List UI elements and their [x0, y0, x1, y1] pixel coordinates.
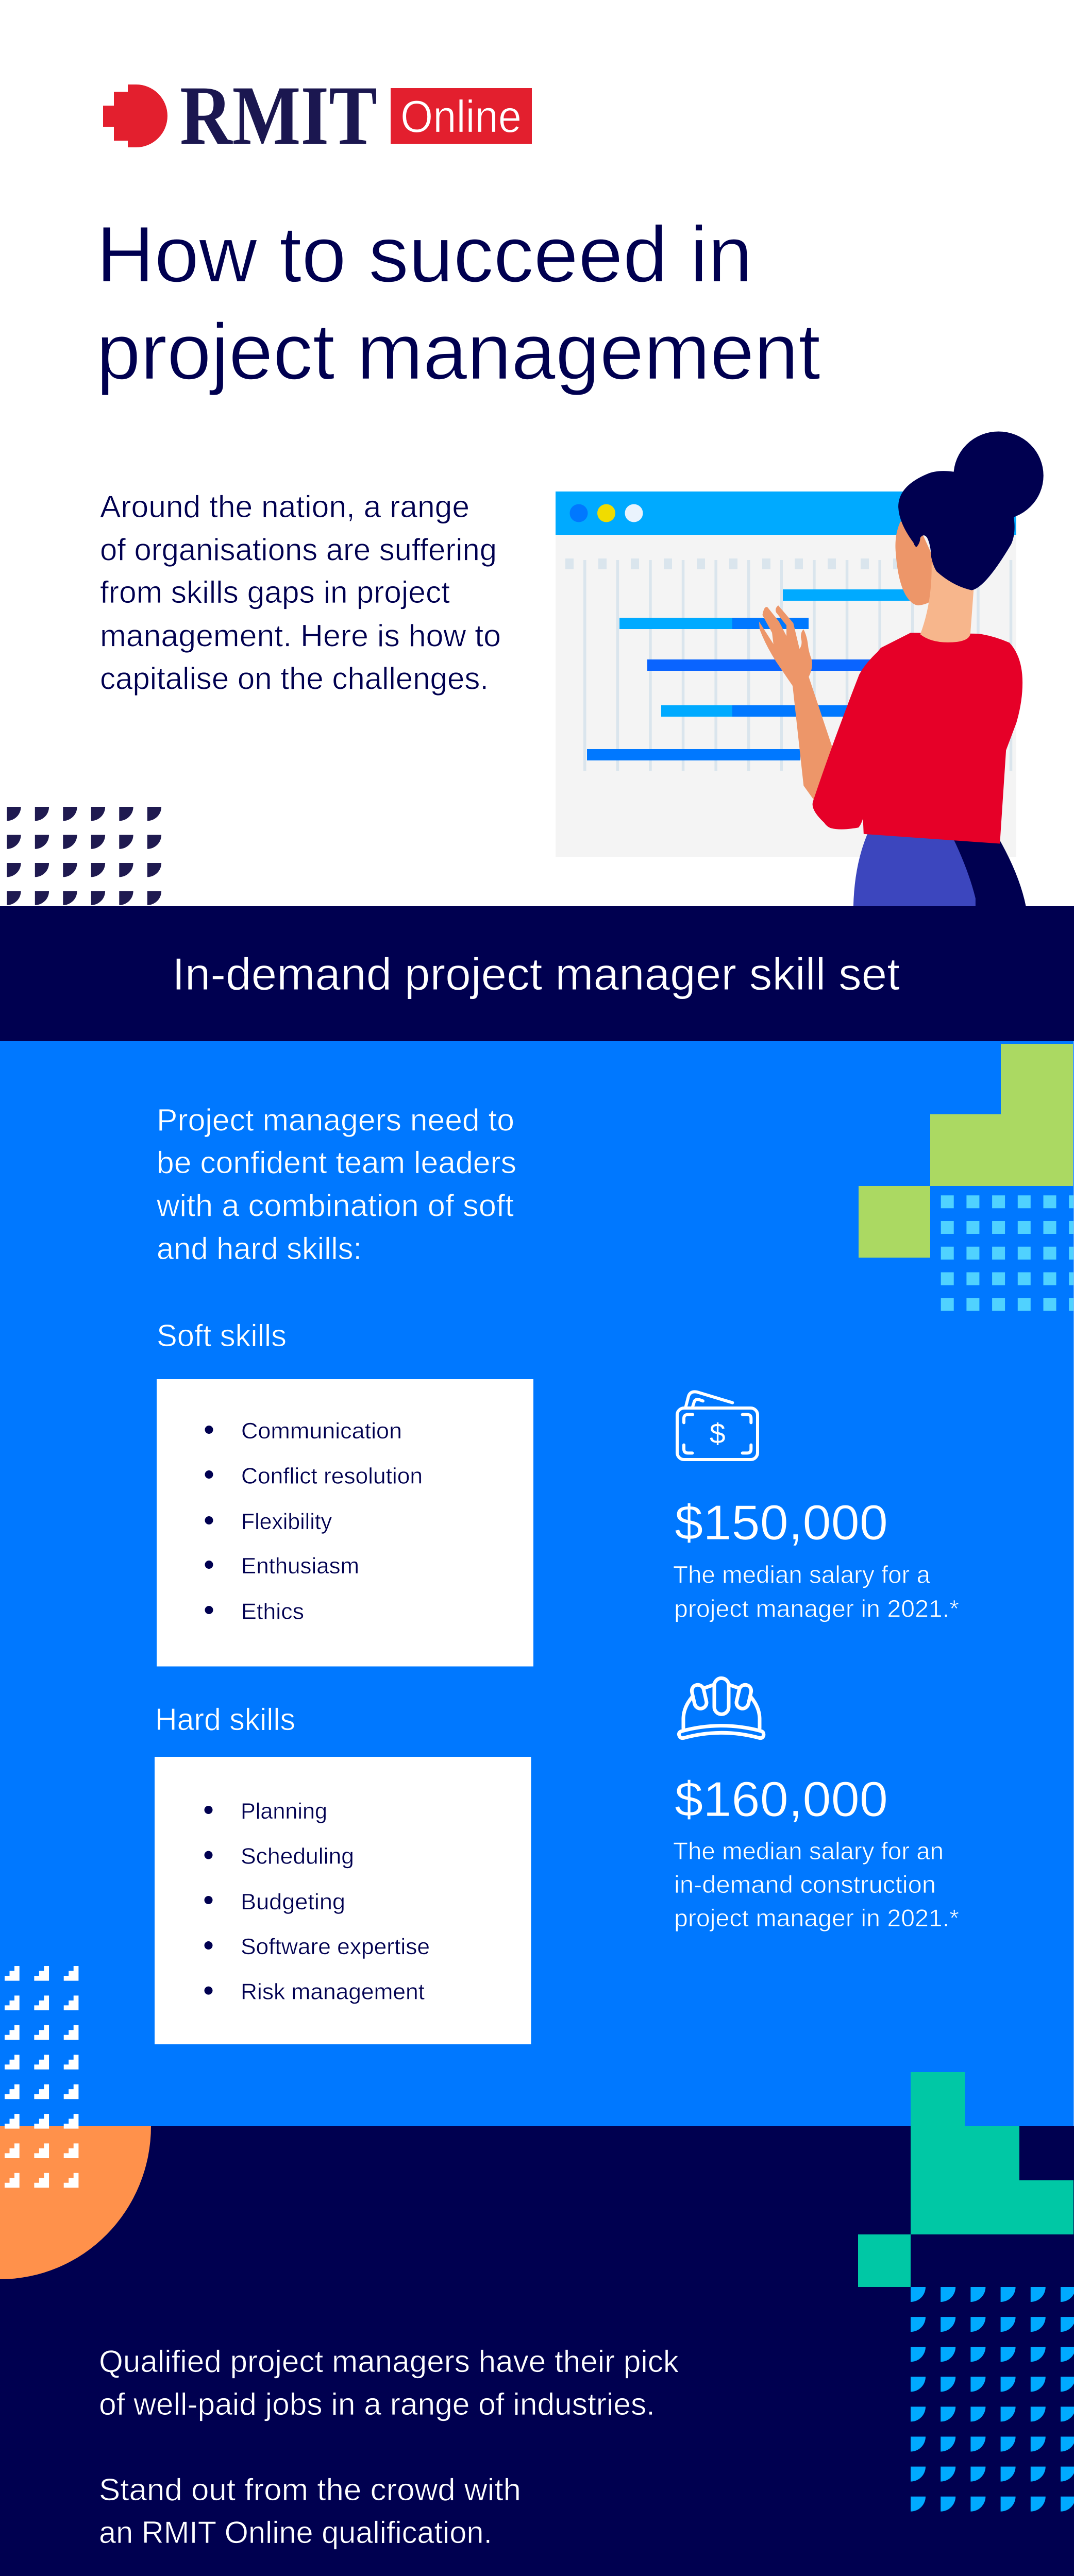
panel: hard skills list: Planning	[241, 1799, 327, 1824]
closing text: an RMIT Online qualification.	[99, 2515, 492, 2550]
band: section heading: In-demand project manager skill set	[172, 948, 900, 999]
closing text: Stand out from the crowd with	[99, 2472, 521, 2507]
panel: soft skills list: Enthusiasm	[241, 1553, 359, 1579]
panel: soft skills list: Communication	[241, 1418, 402, 1444]
intro text: Around the nation, a range	[100, 489, 469, 524]
closing text: Qualified project managers have their pick	[99, 2344, 679, 2379]
panel: soft skills list: Flexibility	[241, 1509, 332, 1534]
panel: blue skills section	[0, 1041, 1074, 2126]
skirt	[853, 831, 977, 906]
stat: 150,000 salary: $150,000	[675, 1495, 888, 1550]
stat: 160,000 salary: $160,000	[675, 1772, 888, 1827]
arm and hand	[759, 605, 833, 803]
panel: soft skills list	[157, 1379, 533, 1666]
stat: 160,000 salary: in-demand construction	[674, 1871, 936, 1898]
panel: hard skills list: Software expertise	[241, 1934, 430, 1959]
text: skills intro: Project managers need to	[157, 1103, 514, 1138]
icon: banknotes: $	[710, 1418, 726, 1450]
panel: soft skills list: Ethics	[241, 1599, 304, 1624]
illustration: woman pointing at chart	[759, 432, 1044, 906]
title	[96, 210, 820, 396]
icon: hard hat	[679, 1678, 764, 1738]
title: project management	[96, 307, 820, 396]
panel: navy closing section	[0, 2126, 1074, 2576]
text: skills intro: with a combination of soft	[156, 1189, 514, 1223]
pattern: light blue squares	[941, 1195, 1074, 1311]
pattern: cyan quarter circles	[911, 2287, 1074, 2512]
stat: 150,000 salary: project manager in 2021.*	[674, 1595, 959, 1622]
chart grid	[565, 558, 1012, 771]
panel: hard skills list	[155, 1757, 531, 2044]
logo badge: Online	[391, 88, 532, 144]
window body	[556, 535, 1016, 857]
text: skills intro	[156, 1103, 516, 1266]
shirt	[813, 633, 1022, 844]
icon: banknotes	[677, 1392, 758, 1460]
logo: RMIT Online: Online	[400, 91, 522, 142]
stat: 150,000 salary: The median salary for a	[673, 1561, 931, 1588]
panel: hard skills list: Risk management	[241, 1979, 425, 2005]
background: white top section	[0, 0, 1074, 906]
stat: 160,000 salary	[673, 1772, 959, 1931]
text: skills intro: and hard skills:	[157, 1231, 362, 1266]
intro text: of organisations are suffering	[100, 533, 497, 567]
pattern: white stair steps	[5, 1966, 78, 2188]
heading: hard skills: Hard skills	[155, 1702, 295, 1737]
face	[895, 521, 937, 605]
decoration: teal pixel block	[858, 2072, 1073, 2287]
window dots	[570, 504, 643, 522]
panel: hard skills list: Budgeting	[241, 1889, 345, 1914]
neck	[920, 564, 974, 642]
closing text: of well-paid jobs in a range of industries.	[99, 2387, 655, 2421]
stat: 160,000 salary: The median salary for an	[673, 1837, 944, 1865]
decoration: orange quarter circle	[0, 2126, 151, 2279]
window header	[556, 492, 1016, 535]
band: section heading	[0, 906, 1074, 1041]
hair	[898, 471, 1015, 590]
pattern: navy quarter circles	[7, 807, 161, 905]
edge strip	[1073, 1041, 1074, 2126]
decoration: green pixel block	[859, 1044, 1073, 1258]
gantt bars	[587, 589, 912, 760]
logo: RMIT Online	[103, 69, 532, 162]
stat: 160,000 salary: project manager in 2021.*	[674, 1904, 959, 1931]
title: How to succeed in	[96, 210, 752, 299]
intro text	[100, 489, 501, 696]
closing text	[99, 2344, 679, 2550]
intro text: from skills gaps in project	[100, 575, 450, 609]
hair bun	[953, 432, 1044, 520]
intro text: management. Here is how to	[100, 619, 501, 653]
logo wordmark: RMIT	[180, 69, 377, 162]
intro text: capitalise on the challenges.	[100, 662, 489, 696]
illustration: gantt chart window	[556, 492, 1016, 857]
heading: soft skills: Soft skills	[157, 1318, 287, 1353]
text: skills intro: be confident team leaders	[157, 1145, 516, 1180]
panel: hard skills list: Scheduling	[241, 1844, 354, 1869]
stat: 150,000 salary	[673, 1495, 959, 1622]
icon: RMIT pixel mark	[103, 84, 167, 147]
panel: soft skills list: Conflict resolution	[241, 1463, 423, 1488]
